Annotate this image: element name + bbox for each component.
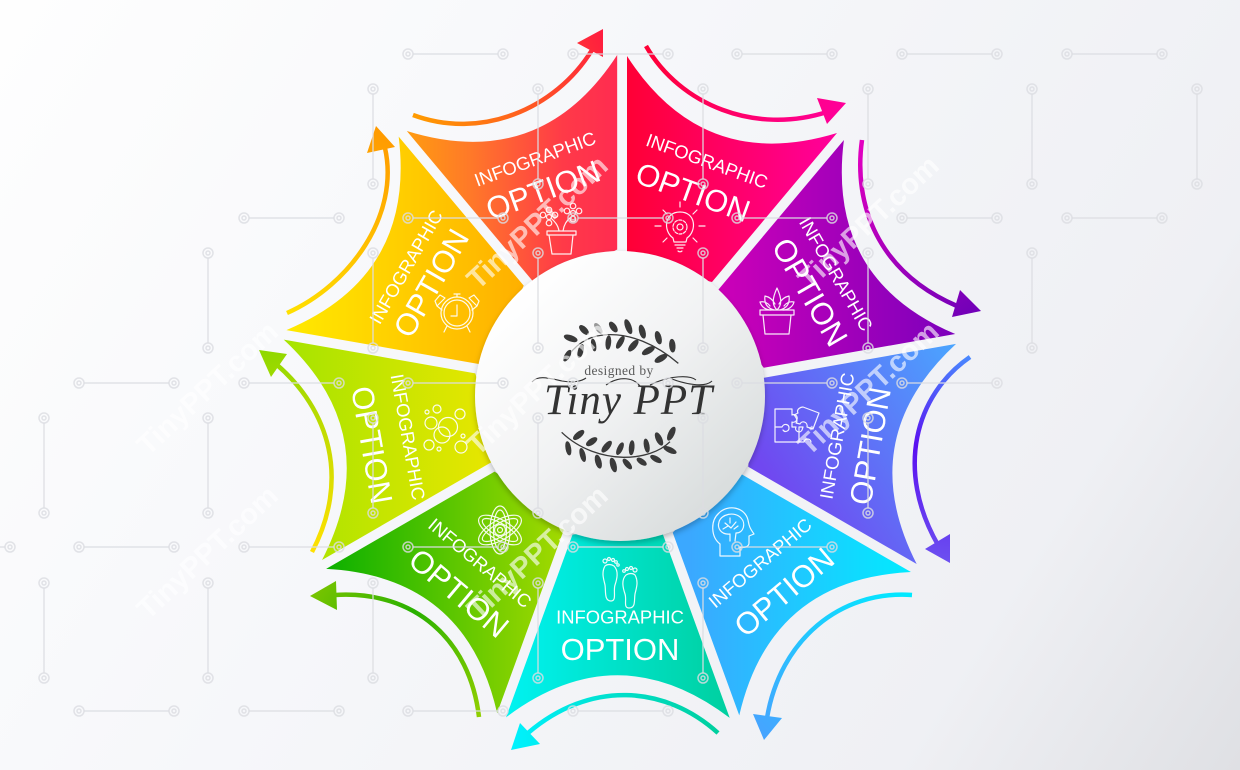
segment 1: pink option (627, 46, 846, 282)
arrow 5 (511, 695, 718, 750)
heading 2: INFOGRAPHIC (795, 213, 877, 335)
watermarks (131, 150, 946, 626)
arrow 9 (413, 29, 603, 124)
option 8: OPTION (386, 223, 476, 343)
heading 8: INFOGRAPHIC (365, 206, 447, 328)
icon: light bulb (655, 202, 705, 252)
option 4: OPTION (727, 541, 841, 644)
arrow 3 (915, 357, 970, 563)
wedge 6 (300, 429, 574, 713)
icon: footprints (603, 558, 637, 608)
wedge 3 (733, 344, 993, 590)
arrow 7 (259, 350, 332, 552)
arrow 1 (646, 46, 846, 124)
option 1: OPTION (631, 156, 755, 229)
arrow 4 (753, 595, 912, 740)
heading 6: INFOGRAPHIC (424, 514, 536, 612)
heading 7: INFOGRAPHIC (387, 372, 429, 502)
segment 9: orange-red option (407, 0, 713, 304)
heading 4: INFOGRAPHIC (704, 514, 816, 612)
option 6: OPTION (402, 542, 516, 645)
wedge 2 (699, 140, 1005, 448)
icon: potted succulent (760, 288, 794, 334)
heading 3: INFOGRAPHIC (816, 371, 858, 501)
wedge 8 (286, 123, 545, 369)
arrow 8 (287, 126, 395, 313)
icon: bubbles (424, 405, 467, 453)
icon: alarm clock (435, 294, 479, 332)
arrow 6 (310, 581, 479, 717)
heading 9: INFOGRAPHIC (471, 127, 599, 191)
segment 5: teal option (455, 506, 730, 770)
watermarks: TinyPPT.com (131, 480, 285, 626)
wedge 9 (407, 0, 713, 304)
heading 5: INFOGRAPHIC (556, 606, 684, 627)
logo: designed by TinyPPT (532, 319, 715, 472)
watermarks: TinyPPT.com (792, 150, 946, 296)
watermarks: TinyPPT.com (461, 150, 615, 296)
option 2: OPTION (765, 232, 855, 352)
watermarks: TinyPPT.com (461, 316, 615, 462)
heading 1: INFOGRAPHIC (643, 129, 771, 193)
wedge 5 (455, 506, 730, 770)
segment 3: violet-blue option (733, 344, 993, 590)
wedge 7 (217, 265, 518, 560)
segment 4: sky blue option (610, 459, 912, 754)
designed by: designed by (584, 363, 654, 378)
icon: atom (474, 506, 526, 554)
icon: flower pot (540, 203, 582, 254)
wedge 4 (610, 459, 911, 754)
brand swashes (532, 377, 712, 386)
segment 7: lime option (217, 265, 518, 560)
centre disc (475, 251, 765, 541)
segment 2: purple option (699, 140, 1005, 448)
arrow 2 (860, 140, 981, 317)
option 3: OPTION (843, 385, 898, 508)
brand name: Tiny PPT (544, 377, 715, 424)
segment 8: yellow option (286, 123, 545, 369)
watermarks: TinyPPT.com (131, 316, 285, 462)
icon: puzzle (775, 407, 819, 442)
wreath bottom (562, 426, 677, 472)
option 7: OPTION (344, 384, 399, 507)
watermarks: TinyPPT.com (461, 480, 615, 626)
icon: head with brain (713, 508, 754, 556)
wreath top (562, 319, 678, 364)
segment 6: green option (300, 429, 574, 717)
wedge 1 (627, 56, 837, 282)
option 9: OPTION (481, 154, 605, 227)
option 5: OPTION (561, 632, 679, 667)
watermarks: TinyPPT.com (792, 316, 946, 462)
